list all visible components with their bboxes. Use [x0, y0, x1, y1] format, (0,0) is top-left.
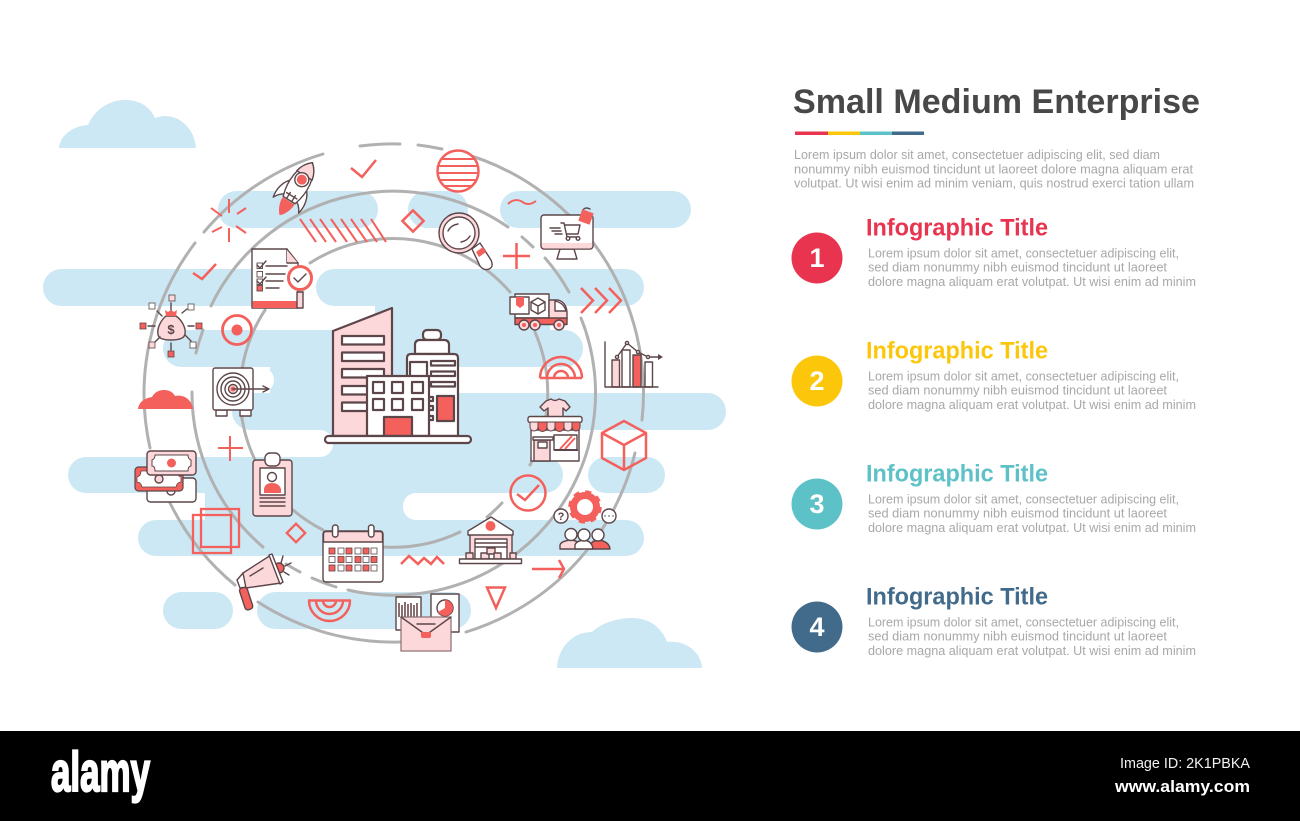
icon: money bag network [140, 295, 202, 357]
icon: delivery truck [510, 294, 567, 330]
footer logo: alamy [51, 740, 150, 803]
icon: zigzag [401, 556, 444, 564]
heading 4: Infographic Title [866, 584, 1048, 610]
description 1: Lorem ipsum dolor sit amet, consectetuer adipiscing elit, [868, 246, 1179, 260]
description 2: sed diam nonummy nibh euismod tincidunt ut laoreet [868, 382, 1167, 398]
description 1: dolore magna aliquam erat volutpat. Ut wisi enim ad minim [868, 274, 1196, 289]
description 4: Lorem ipsum dolor sit amet, consectetuer adipiscing elit, [868, 614, 1179, 630]
icon: overlapping squares [193, 509, 239, 553]
icon: plus left [218, 436, 243, 461]
description 3: dolore magna aliquam erat volutpat. Ut wisi enim ad minim [868, 520, 1196, 535]
icon: shopping cart on monitor [541, 208, 594, 259]
description 3: Lorem ipsum dolor sit amet, consectetuer adipiscing elit, [868, 492, 1179, 506]
icon: money bag network: $ [167, 322, 175, 337]
icon: red cloud [138, 390, 193, 409]
central icon: office buildings [325, 308, 471, 443]
icon: cube outline [602, 421, 646, 470]
icon: calendar [323, 525, 383, 582]
step 1 [792, 214, 1196, 289]
icon: target safe [213, 368, 269, 416]
icon: diamond lower [287, 524, 305, 542]
number badge 2: 2 [809, 366, 825, 396]
icon: small check left [193, 264, 216, 279]
icon: warehouse [460, 517, 522, 564]
icon: diagonal hatch [300, 219, 386, 242]
icon: arrow right [532, 560, 564, 578]
description 2: dolore magna aliquam erat volutpat. Ut wisi enim ad minim [868, 397, 1196, 412]
icon: red semicircle arcs [540, 357, 582, 378]
icon: checklist with magnifier [252, 249, 312, 308]
heading 3: Infographic Title [866, 460, 1048, 488]
description 3 [868, 492, 1196, 535]
heading 2: Infographic Title [866, 338, 1048, 364]
number badge 3 [792, 478, 842, 530]
description 1: sed diam nonummy nibh euismod tincidunt ut laoreet [868, 260, 1167, 274]
icon: red target dot [222, 316, 252, 344]
icon: tilde [508, 200, 536, 204]
icon: diamond top [402, 210, 424, 232]
icon: banknotes [135, 451, 196, 502]
icon: plus right [503, 243, 530, 269]
icon: team with gear [554, 492, 616, 549]
icon: small check top [351, 160, 376, 177]
step 3 [792, 460, 1196, 535]
intro paragraph [794, 147, 1194, 190]
step 4 [792, 584, 1196, 658]
image id: Image ID: 2K1PBKA [1120, 755, 1250, 772]
description 4: sed diam nonummy nibh euismod tincidunt ut laoreet [868, 628, 1167, 644]
icon: triangle [487, 588, 505, 608]
concentric dashed rings [144, 144, 643, 642]
icon: downward red arcs [308, 600, 351, 621]
title underline [795, 132, 924, 135]
icon: rocket [266, 154, 326, 224]
footer bar [0, 731, 1300, 821]
intro paragraph: Lorem ipsum dolor sit amet, consectetuer adipiscing elit, sed diam [794, 147, 1160, 162]
heading 1: Infographic Title [866, 214, 1048, 242]
icon: megaphone [237, 554, 291, 611]
icon: striped circle [438, 150, 478, 192]
icon: red burst [211, 199, 246, 242]
description 1 [868, 246, 1196, 289]
number badge 4 [792, 602, 842, 652]
number badge 4: 4 [809, 612, 825, 642]
icon: magnifying glass [439, 213, 492, 270]
icon: check in circle [510, 476, 546, 510]
footer url: www.alamy.com [1114, 777, 1250, 796]
description 4: dolore magna aliquam erat volutpat. Ut wisi enim ad minim [868, 643, 1196, 658]
icon: triple chevrons [581, 288, 621, 313]
background: light blue cloud bands [43, 100, 726, 668]
step 2 [792, 338, 1196, 412]
description 2: Lorem ipsum dolor sit amet, consectetuer adipiscing elit, [868, 368, 1179, 384]
intro paragraph: nonummy nibh euismod tincidunt ut laoreet dolore magna aliquam erat [794, 162, 1193, 176]
number badge 3: 3 [809, 489, 825, 519]
number badge 2 [792, 356, 842, 406]
number badge 1: 1 [809, 243, 825, 273]
icon: clothing shop [528, 399, 582, 461]
icon: id badge [253, 453, 292, 516]
icon: team with gear: ? [558, 511, 565, 523]
main title: Small Medium Enterprise [793, 83, 1200, 121]
number badge 1 [792, 232, 842, 284]
intro paragraph: volutpat. Ut wisi enim ad minim veniam, quis nostrud exerci tation ullam [794, 176, 1194, 190]
icon: mail with reports [396, 594, 459, 651]
icon: bar chart with trend [605, 341, 663, 387]
description 2 [868, 368, 1196, 412]
description 3: sed diam nonummy nibh euismod tincidunt ut laoreet [868, 506, 1167, 520]
description 4 [868, 614, 1196, 658]
